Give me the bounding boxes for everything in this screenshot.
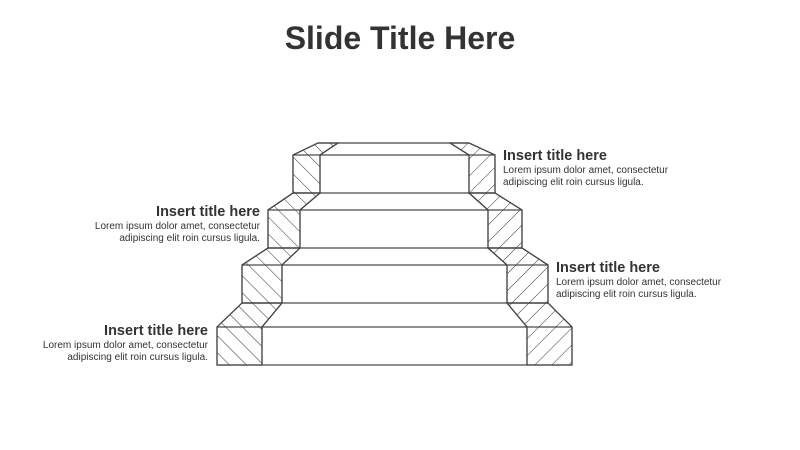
step 1	[293, 143, 495, 193]
text block 2: Insert title here	[156, 204, 260, 220]
step 4	[217, 303, 572, 365]
text block 1: Lorem ipsum dolor amet, consectetur	[503, 165, 668, 176]
text block 2	[95, 204, 260, 244]
text block 4: Lorem ipsum dolor amet, consectetur	[43, 340, 208, 351]
text block 1: Insert title here	[503, 148, 607, 164]
text block 4: Insert title here	[104, 323, 208, 339]
text block 3: Lorem ipsum dolor amet, consectetur	[556, 277, 721, 288]
step 2	[268, 193, 522, 248]
text block 3	[556, 260, 721, 300]
text block 1	[503, 148, 668, 188]
step 3	[242, 248, 548, 303]
text block 2: adipiscing elit roin cursus ligula.	[119, 233, 260, 244]
text block 1: adipiscing elit roin cursus ligula.	[503, 177, 644, 188]
text block 3: Insert title here	[556, 260, 660, 276]
title: Slide Title Here	[285, 20, 515, 56]
text block 4	[43, 323, 208, 363]
text block 2: Lorem ipsum dolor amet, consectetur	[95, 221, 260, 232]
text block 4: adipiscing elit roin cursus ligula.	[67, 352, 208, 363]
text block 3: adipiscing elit roin cursus ligula.	[556, 289, 697, 300]
